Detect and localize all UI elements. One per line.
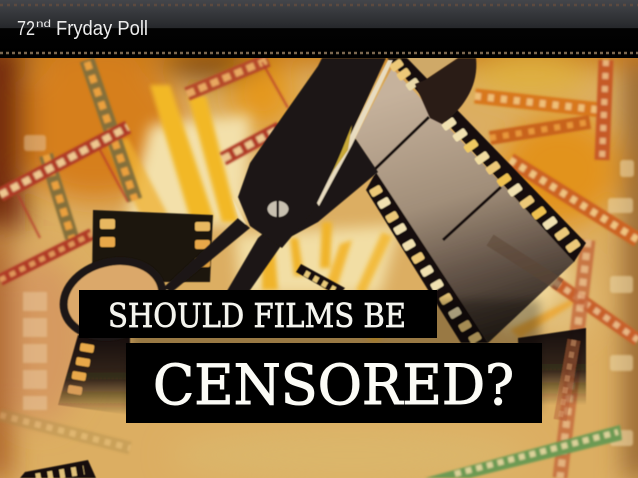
title box: censored: CENSORED? xyxy=(153,353,514,417)
film strip: dark upper left behind scissors xyxy=(92,210,213,282)
handle arm xyxy=(163,218,250,292)
top perforation line xyxy=(0,4,638,6)
strip: red vertical right xyxy=(560,240,588,478)
strip: red vertical top right xyxy=(602,60,606,160)
frames xyxy=(355,68,575,343)
film strip: small black near scissors xyxy=(296,264,345,296)
strip: red lower left xyxy=(0,234,92,280)
pivot screw xyxy=(268,200,288,218)
smudge: pale left frame xyxy=(24,135,46,151)
header title: 72nd Fryday Poll xyxy=(17,18,148,40)
strip: orange-red right diagonal xyxy=(510,160,638,240)
cream frame behind blade tip xyxy=(405,58,458,80)
strip: olive lower left xyxy=(46,155,72,238)
pale holes: right column xyxy=(608,160,634,446)
upper perforated band xyxy=(387,58,586,262)
lower perforated band xyxy=(366,172,488,343)
title box: should films be: SHOULD FILMS BE xyxy=(108,296,406,335)
film strip: black lower left corner xyxy=(20,460,96,478)
strip: olive upper left xyxy=(87,60,135,200)
header title: 72nd Fryday Poll: nd xyxy=(36,19,51,30)
right blade tip xyxy=(415,58,476,124)
ring handle xyxy=(56,251,170,347)
lower band holes xyxy=(369,185,482,344)
reflective blade edge xyxy=(317,60,393,206)
large film strip xyxy=(355,58,586,344)
strip: red left diagonal xyxy=(0,127,128,195)
header title: 72nd Fryday Poll: 72 xyxy=(17,18,35,40)
film strip: fading lower left xyxy=(58,335,130,415)
film strip: dark fading right xyxy=(518,328,586,420)
header title: 72nd Fryday Poll: Fryday Poll xyxy=(56,18,148,40)
strip: red top xyxy=(187,60,268,94)
thin red frame lines xyxy=(18,62,288,238)
header bar xyxy=(0,0,638,58)
strip: red beside blade xyxy=(223,128,280,159)
bottom perforation line xyxy=(0,52,638,54)
sunburst rays xyxy=(108,85,590,342)
upper band holes xyxy=(389,58,581,253)
strip: orange right middle xyxy=(490,122,590,138)
film strip: green xyxy=(425,425,622,478)
upper blade xyxy=(238,58,386,248)
strip: pale vertical left xyxy=(23,292,47,410)
shadow behind title boxes xyxy=(130,300,540,410)
scissors xyxy=(56,58,476,347)
lower blade and arm xyxy=(224,138,378,296)
frame dividers xyxy=(373,117,501,240)
strip: red lower right diagonal xyxy=(555,282,638,340)
strip: orange right top xyxy=(475,96,600,110)
cream edge of scissors xyxy=(166,197,246,292)
strip: faded left bottom xyxy=(0,415,130,448)
faded strip inside lower frame xyxy=(490,240,560,285)
